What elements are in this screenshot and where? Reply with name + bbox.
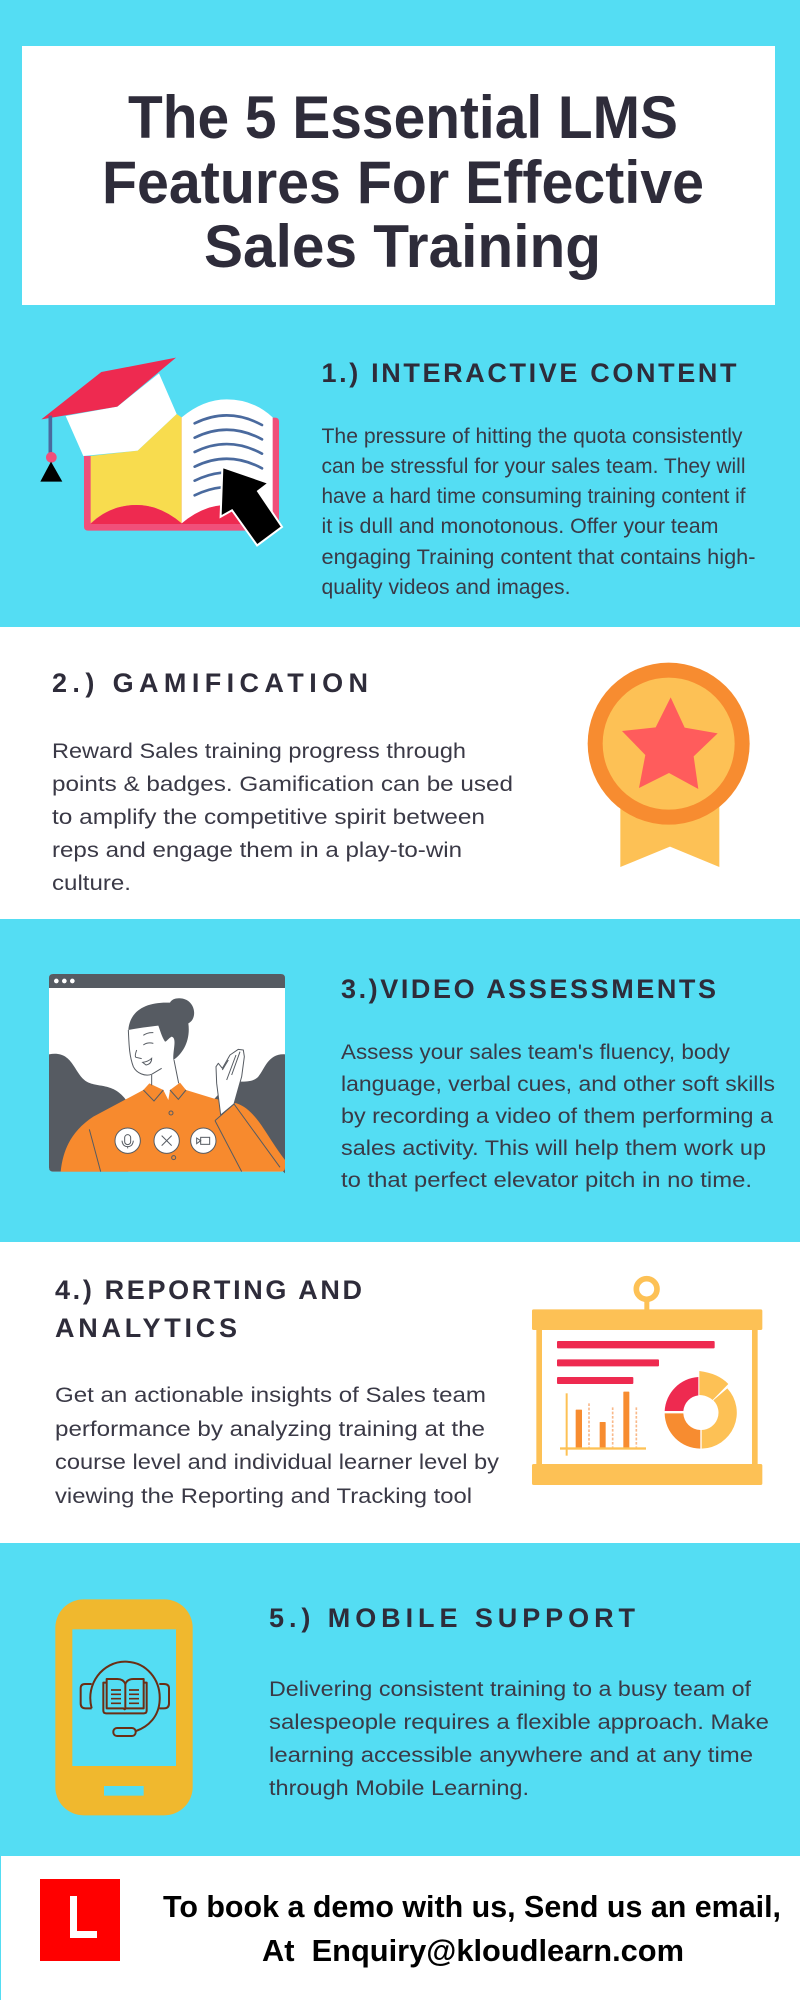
panel: mobile support — [0, 1543, 800, 1856]
title: Sales Training — [204, 213, 601, 280]
text block: reporting and analytics: course level and individual learner level by — [55, 1450, 499, 1474]
text block: mobile support — [269, 1677, 769, 1800]
panel: gamification — [0, 627, 800, 919]
text block: mobile support: salespeople requires a flexible approach. Make — [269, 1710, 769, 1734]
call to action text — [163, 1889, 781, 1968]
text block: video assessments — [341, 1040, 775, 1192]
text block: video assessments: by recording a video of them performing a — [341, 1104, 773, 1128]
icon: presentation board with charts — [532, 1279, 762, 1485]
heading: video assessments: 3.)VIDEO ASSESSMENTS — [341, 974, 716, 1004]
panel: reporting and analytics — [0, 1242, 800, 1543]
panel: video assessments — [0, 919, 800, 1242]
text block: interactive content — [322, 424, 756, 599]
title panel — [22, 46, 775, 305]
icon: end call button — [154, 1128, 179, 1153]
icon: medal with star — [588, 663, 750, 867]
text block: interactive content: have a hard time consuming training content if — [322, 484, 746, 508]
text block: video assessments: Assess your sales team's fluency, body — [341, 1040, 730, 1064]
text block: interactive content: The pressure of hitting the quota consistently — [322, 424, 743, 448]
heading: gamification: 2.) GAMIFICATION — [52, 668, 368, 698]
text block: gamification: points & badges. Gamification can be used — [52, 772, 513, 796]
text block: interactive content: quality videos and images. — [322, 575, 570, 599]
heading: interactive content: 1.) INTERACTIVE CONTENT — [322, 358, 737, 388]
bar chart — [560, 1392, 646, 1456]
heading: reporting and analytics: ANALYTICS — [55, 1313, 237, 1343]
panel: interactive content — [0, 305, 800, 627]
text block: interactive content: can be stressful for your sales team. They will — [322, 454, 746, 478]
call to action text: At Enquiry@kloudlearn.com — [262, 1933, 684, 1968]
text block: gamification: Reward Sales training progress through — [52, 739, 466, 763]
text block: reporting and analytics: Get an actionable insights of Sales team — [55, 1383, 486, 1407]
text block: mobile support: Delivering consistent training to a busy team of — [269, 1677, 751, 1701]
heading: reporting and analytics — [55, 1275, 362, 1343]
text block: mobile support: learning accessible anywhere and at any time — [269, 1743, 753, 1767]
icon: microphone button — [115, 1128, 140, 1153]
text block: reporting and analytics — [55, 1383, 499, 1508]
icon: smartphone with headset and book — [55, 1599, 193, 1815]
donut chart — [665, 1371, 737, 1449]
text block: gamification: to amplify the competitive spirit between — [52, 805, 485, 829]
text block: video assessments: sales activity. This will help them work up — [341, 1136, 766, 1160]
call to action text: To book a demo with us, Send us an email, — [163, 1889, 781, 1924]
text block: interactive content: it is dull and monotonous. Offer your team — [322, 514, 718, 538]
text block: interactive content: engaging Training content that contains high- — [322, 545, 756, 569]
panel: footer call to action — [1, 1856, 800, 2000]
text block: video assessments: to that perfect elevator pitch in no time. — [341, 1168, 752, 1192]
icon: camera button — [191, 1128, 216, 1153]
icon: graduation cap and open book — [40, 358, 281, 544]
title — [102, 84, 704, 280]
text block: mobile support: through Mobile Learning. — [269, 1776, 529, 1800]
text block: reporting and analytics: viewing the Reporting and Tracking tool — [55, 1484, 472, 1508]
text block: gamification — [52, 739, 513, 895]
heading: mobile support: 5.) MOBILE SUPPORT — [269, 1603, 636, 1633]
heading: reporting and analytics: 4.) REPORTING AND — [55, 1275, 362, 1305]
icon: video call window — [49, 974, 285, 1173]
text block: video assessments: language, verbal cues, and other soft skills — [341, 1072, 775, 1096]
text block: gamification: culture. — [52, 871, 131, 895]
icon: red logo — [40, 1879, 120, 1961]
title: Features For Effective — [102, 149, 704, 216]
text block: gamification: reps and engage them in a play-to-win — [52, 838, 462, 862]
text block: reporting and analytics: performance by analyzing training at the — [55, 1417, 485, 1441]
title: The 5 Essential LMS — [128, 84, 678, 151]
